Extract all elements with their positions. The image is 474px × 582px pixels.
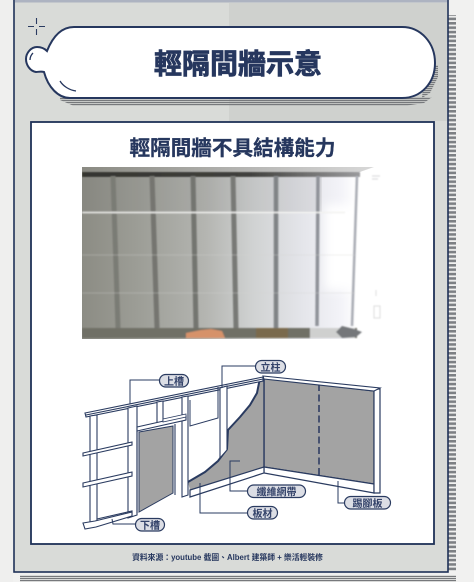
label: 下槽: 下槽 <box>140 519 160 532</box>
label: 板材 <box>248 506 278 520</box>
banner pill <box>26 27 435 98</box>
right wall board <box>264 378 374 484</box>
photo: floor objects <box>186 329 225 338</box>
skirting board <box>190 389 380 497</box>
label: 立柱 <box>256 360 286 374</box>
content panel <box>31 122 434 544</box>
photo: darker upper panels <box>184 177 322 212</box>
subtitle: 輕隔間牆不具結構能力 <box>130 137 335 160</box>
torn board edge <box>188 378 260 482</box>
bottom track <box>83 512 132 529</box>
left wall outline <box>190 387 218 426</box>
label: 纖維網帶 <box>248 485 306 498</box>
title banner <box>26 27 438 106</box>
photo: floor band <box>82 328 357 338</box>
title: 輕隔間牆示意 <box>154 48 322 80</box>
label: 下槽 <box>136 518 164 532</box>
exposed left wall board <box>188 378 264 490</box>
label: 上槽: 上槽 <box>164 375 184 388</box>
studs <box>90 386 227 525</box>
icon: sparkle <box>28 18 45 35</box>
top track <box>85 376 380 417</box>
label: 上槽 <box>160 374 188 388</box>
label: 板材: 板材 <box>252 507 272 520</box>
door panel <box>139 426 173 512</box>
striped shadow: bottom <box>20 575 456 582</box>
page margin shading <box>0 0 13 582</box>
door frame edge <box>137 424 175 513</box>
fibre tape seam <box>318 384 320 476</box>
label: 踢腳板: 踢腳板 <box>352 497 382 510</box>
diagram: wall construction <box>83 376 380 529</box>
corner edge <box>263 378 265 467</box>
photo: overexposed right side <box>324 206 346 289</box>
banner highlights <box>30 53 76 91</box>
cross noggings <box>83 442 132 523</box>
photo: steel stud wall frame <box>82 167 380 339</box>
photo: ceiling band <box>178 167 374 172</box>
striped shadow: right side <box>448 15 456 572</box>
photo: horizontal highlights <box>82 212 345 214</box>
label: 踢腳板 <box>344 496 390 510</box>
photo: studs <box>113 176 357 328</box>
banner stripe shadow <box>60 97 432 106</box>
label: 立柱: 立柱 <box>260 361 280 374</box>
leader lines <box>112 366 344 524</box>
source note: 資料來源：youtube 截圖、Albert 建築師 + 樂活輕裝修 <box>132 552 323 562</box>
door header <box>137 416 186 431</box>
label: 纖維網帶: 纖維網帶 <box>256 486 296 498</box>
